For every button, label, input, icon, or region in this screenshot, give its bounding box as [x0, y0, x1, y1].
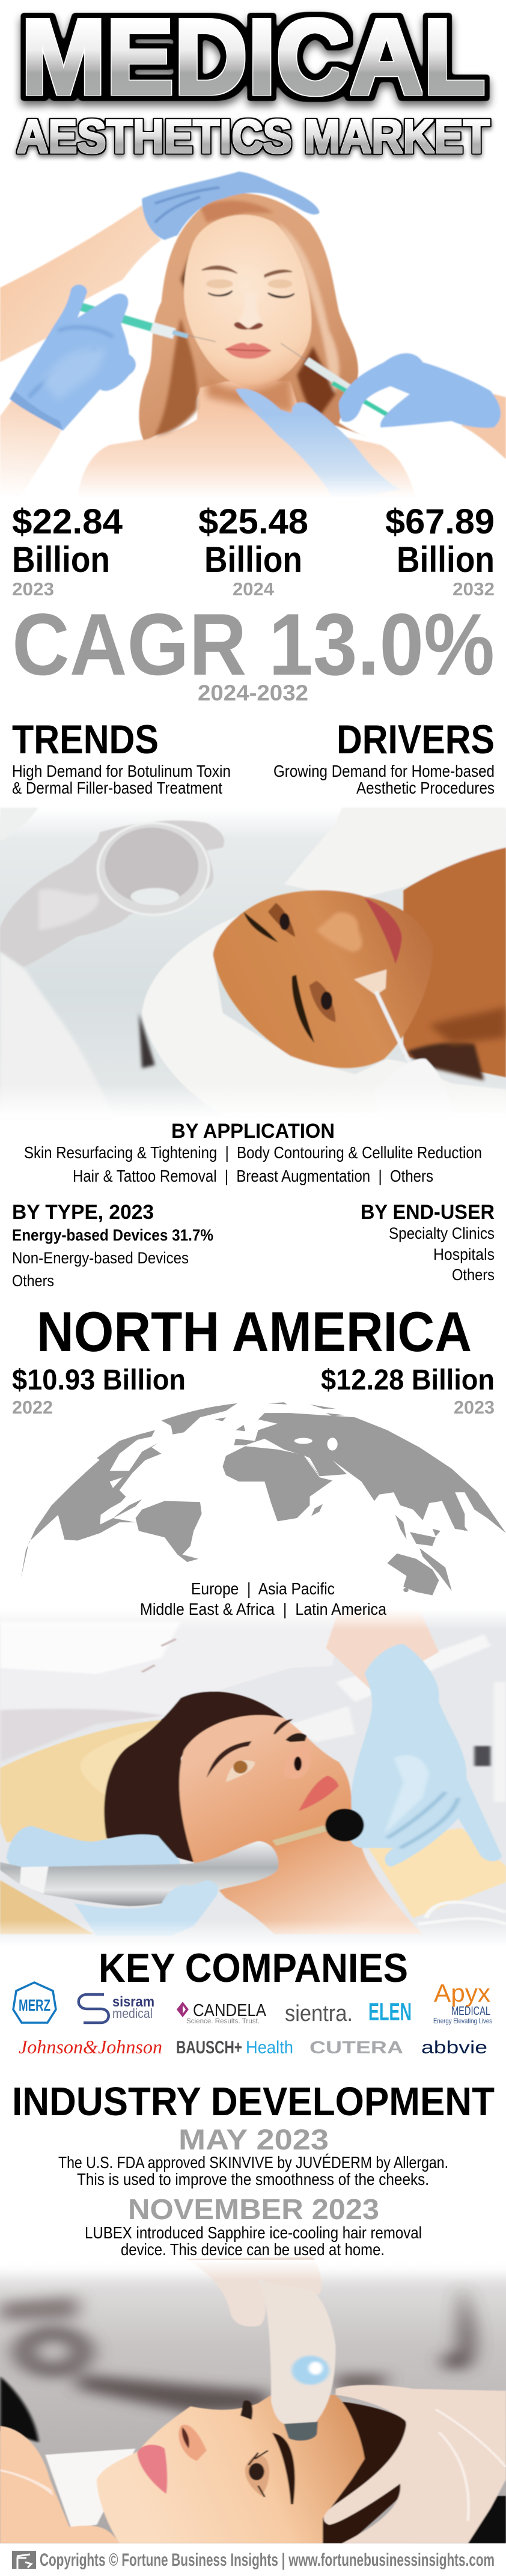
logo: Cutera: CUTERA	[309, 2038, 403, 2058]
logo: Merz: MERZ	[19, 1996, 50, 2014]
other regions: Middle East & Africa | Latin America	[140, 1600, 386, 1618]
market value 2023: Billion	[12, 539, 110, 580]
by application	[24, 1120, 482, 1185]
logo: Candela	[177, 2001, 267, 2025]
market value 2023	[12, 502, 123, 600]
world map	[21, 1402, 506, 1596]
image: cooling hair removal device	[0, 2252, 506, 2551]
logo: Sisram Medical	[79, 1994, 154, 2023]
North America value 2023	[321, 1364, 495, 1418]
market value 2024: $25.48	[198, 502, 308, 541]
trends: High Demand for Botulinum Toxin	[12, 762, 231, 780]
by application: Hair & Tattoo Removal | Breast Augmentation | Others	[73, 1167, 433, 1185]
market value 2032: $67.89	[385, 502, 495, 541]
logo: Bausch Health: Health	[246, 2038, 293, 2058]
by type	[12, 1201, 213, 1290]
development: November 2023: LUBEX introduced Sapphire ice-cooling hair removal	[85, 2223, 422, 2242]
development: May 2023: This is used to improve the smoothness of the cheeks.	[77, 2170, 429, 2189]
trends	[12, 717, 231, 797]
hero image: woman receiving injections	[0, 172, 506, 498]
market value 2032: Billion	[397, 539, 495, 580]
by type: Others	[12, 1272, 54, 1290]
icon: Fortune Business Insights logo	[12, 2551, 36, 2569]
image: facial treatment with fan brush	[0, 807, 506, 1118]
logo: Merz	[13, 1982, 56, 2023]
footer	[12, 2550, 495, 2570]
logo: Apyx Medical: MEDICAL	[451, 2005, 490, 2018]
North America value 2022: $10.93 Billion	[12, 1364, 186, 1396]
market value 2023: $22.84	[12, 502, 123, 541]
by type: BY TYPE, 2023	[12, 1201, 154, 1224]
market value 2032	[385, 502, 495, 600]
logo: Sisram Medical: sisram	[112, 1994, 154, 2010]
by end-user: BY END-USER	[361, 1201, 495, 1224]
development: May 2023	[58, 2124, 448, 2189]
North America value 2022: 2022	[12, 1397, 53, 1418]
market value 2024: 2024	[233, 579, 275, 600]
image: device facial treatment	[0, 1609, 506, 1946]
title line 1: MEDICAL: MEDICAL	[21, 0, 486, 117]
trends: & Dermal Filler-based Treatment	[12, 779, 222, 797]
North America value 2022	[12, 1364, 186, 1418]
by type: Non-Energy-based Devices	[12, 1249, 189, 1267]
North America value 2023: $12.28 Billion	[321, 1364, 495, 1396]
by end-user: Others	[452, 1266, 495, 1284]
logo: Candela: Science. Results. Trust.	[186, 2017, 260, 2025]
logo: Apyx Medical: Energy Elevating Lives	[433, 2017, 492, 2025]
market value 2024	[198, 502, 308, 600]
logo: AbbVie: abbvie	[421, 2038, 487, 2058]
other regions: Europe | Asia Pacific	[191, 1579, 335, 1598]
market value 2024: Billion	[204, 539, 302, 580]
development: November 2023	[85, 2194, 422, 2259]
market value 2032: 2032	[453, 579, 495, 600]
other regions	[140, 1579, 386, 1618]
development: November 2023: NOVEMBER 2023	[128, 2194, 379, 2226]
logo: Elen: ELEN	[368, 1997, 412, 2026]
logo: Bausch Health: BAUSCH+	[176, 2038, 242, 2058]
heading: key companies: KEY COMPANIES	[99, 1945, 408, 1991]
logo: Johnson & Johnson: Johnson&Johnson	[19, 2036, 162, 2058]
logo: Sisram Medical: medical	[112, 2006, 153, 2021]
development: November 2023: device. This device can be used at home.	[121, 2240, 385, 2259]
title	[17, 0, 490, 163]
drivers	[273, 717, 495, 797]
logo: Apyx Medical: Apyx	[434, 1979, 490, 2007]
market value 2023: 2023	[12, 579, 54, 600]
heading: North America: NORTH AMERICA	[37, 1300, 472, 1363]
by end-user	[361, 1201, 495, 1284]
trends: TRENDS	[12, 717, 159, 762]
CAGR: 2024-2032	[198, 681, 308, 705]
by application: BY APPLICATION	[171, 1120, 335, 1143]
by type: Energy-based Devices 31.7%	[12, 1226, 213, 1244]
development: May 2023: MAY 2023	[178, 2124, 329, 2156]
logo: Candela: CANDELA	[193, 2001, 267, 2020]
by end-user: Specialty Clinics	[389, 1224, 495, 1242]
North America value 2023: 2023	[454, 1397, 495, 1418]
logo: Apyx Medical	[433, 1979, 492, 2025]
logo: Sientra: sientra.	[285, 2001, 353, 2026]
by end-user: Hospitals	[433, 1245, 495, 1263]
